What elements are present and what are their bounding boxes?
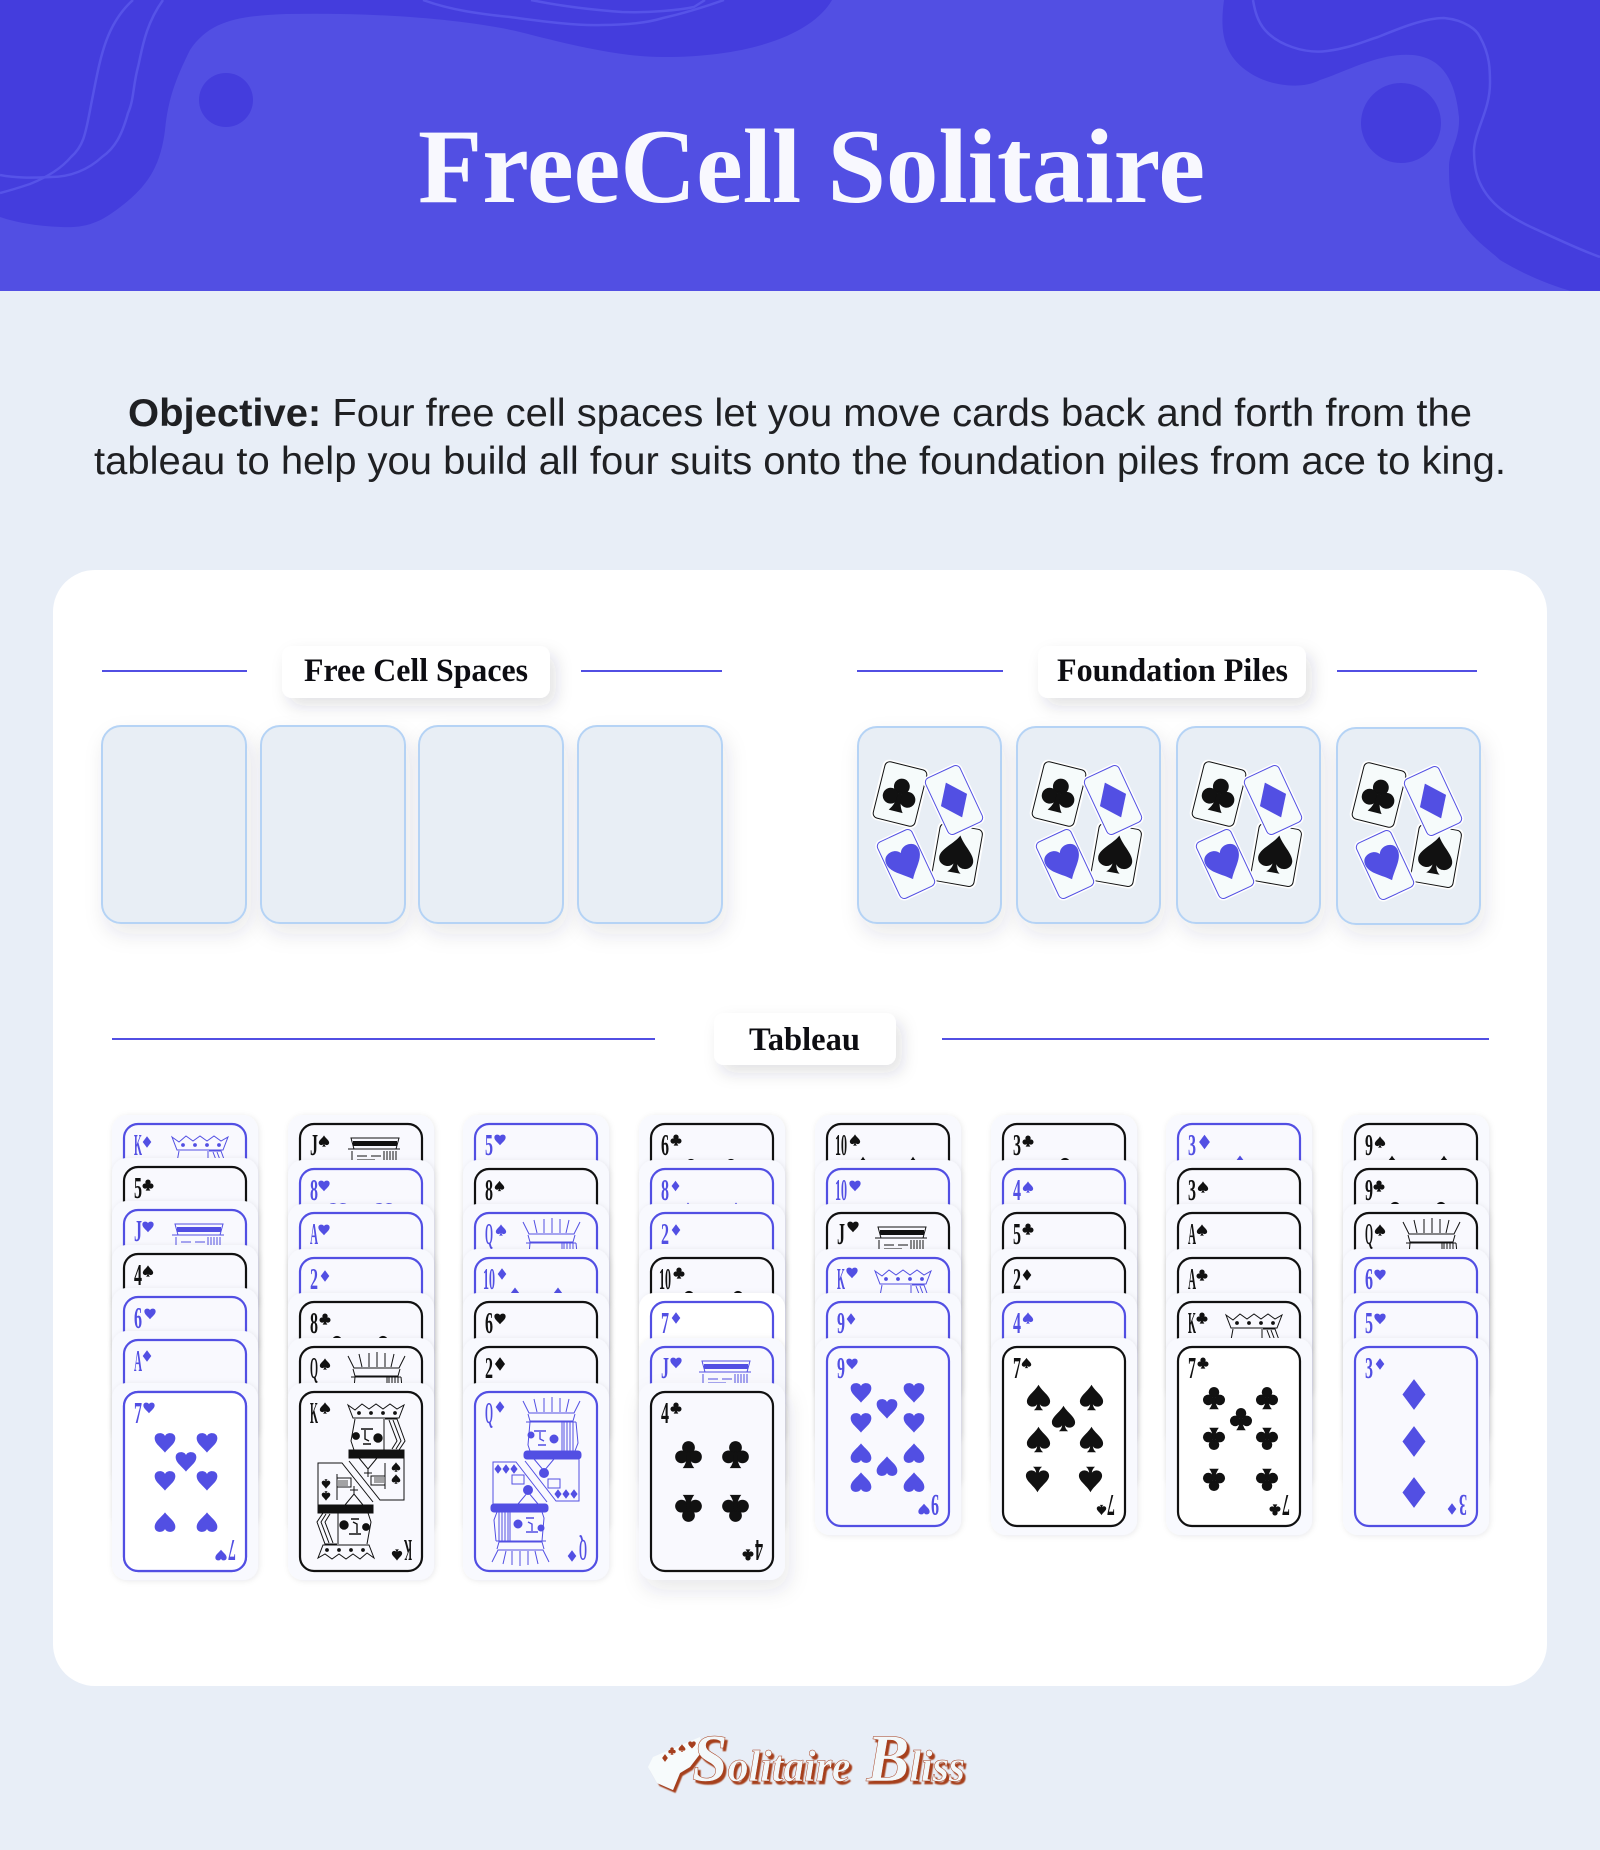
objective text: [94, 392, 1506, 483]
objective text: tableau to help you build all four suits onto the foundation piles from ace to king.: [94, 440, 1506, 483]
card 5 hearts: 5: [485, 1127, 493, 1162]
card 4 spades: 4: [134, 1257, 142, 1292]
card 2 diamonds: [288, 1249, 434, 1446]
column 3: [463, 1115, 609, 1580]
logo: Solitaire Bliss: Solitaire Bliss: [692, 1720, 965, 1796]
card 7 spades, top of column: 7: [1013, 1350, 1021, 1385]
card 3 diamonds: [1166, 1115, 1312, 1312]
card K hearts: [815, 1249, 961, 1446]
card 7 diamonds: [639, 1293, 785, 1490]
card 7 clubs, top of column: [1166, 1338, 1312, 1535]
heading: free cell spaces: Free Cell Spaces: [304, 653, 528, 689]
card A hearts: [288, 1204, 434, 1401]
card J hearts: [112, 1201, 258, 1398]
card J spades: J: [310, 1127, 318, 1162]
card 8 diamonds: [639, 1160, 785, 1357]
card A clubs: [1166, 1249, 1312, 1446]
card 3 diamonds, top of column: [1343, 1338, 1489, 1535]
card 3 spades: [1166, 1160, 1312, 1357]
card K spades, top of column: K: [404, 1533, 412, 1568]
card 7 spades, top of column: 7: [1107, 1488, 1115, 1523]
heading: foundation piles: [1038, 646, 1306, 698]
card 3 clubs: [991, 1115, 1137, 1312]
card 5 hearts: [1343, 1293, 1489, 1490]
column 7: [1166, 1115, 1312, 1535]
header banner: [0, 0, 1600, 291]
card 10 hearts: [815, 1160, 961, 1357]
card 10 clubs: [639, 1249, 785, 1446]
card 2 diamonds: 2: [310, 1261, 318, 1296]
card 10 diamonds: [463, 1249, 609, 1446]
card 2 diamonds black: 2: [1013, 1261, 1021, 1296]
column 1: [112, 1115, 258, 1580]
column 6: [991, 1115, 1137, 1535]
foundation pile 2: [1017, 727, 1160, 923]
card 3 diamonds, top of column: 3: [1365, 1350, 1373, 1385]
card 6 clubs: 6: [661, 1127, 669, 1162]
card K clubs: K: [1188, 1305, 1196, 1340]
card 5 clubs: [112, 1158, 258, 1355]
card 5 hearts: [463, 1115, 609, 1312]
card 5 clubs: 5: [1013, 1216, 1021, 1251]
card 7 diamonds: 7: [661, 1305, 669, 1340]
card 4 spades blue: 4: [1013, 1172, 1021, 1207]
card 6 hearts: 6: [134, 1300, 142, 1335]
card 8 diamonds: 8: [661, 1172, 669, 1207]
card 9 clubs: 9: [1365, 1172, 1373, 1207]
title: FreeCell Solitaire: [418, 108, 1205, 225]
card 6 hearts: 6: [1365, 1261, 1373, 1296]
column 2: [288, 1115, 434, 1580]
card 2 diamonds black: 2: [485, 1350, 493, 1385]
card 4 clubs, top of column: 4: [661, 1395, 669, 1430]
card 9 hearts, top of column: [815, 1338, 961, 1535]
card K diamonds: K: [134, 1127, 142, 1162]
card K diamonds: [112, 1115, 258, 1312]
card 6 clubs: [639, 1115, 785, 1312]
card 4 spades blue: [991, 1293, 1137, 1490]
card J hearts: J: [661, 1350, 669, 1385]
card Q spades blue: [463, 1204, 609, 1401]
card A diamonds: A: [134, 1343, 142, 1378]
card 6 hearts black: 6: [485, 1305, 493, 1340]
card 7 spades, top of column: [991, 1338, 1137, 1535]
card 4 spades blue: [991, 1160, 1137, 1357]
card J hearts: [639, 1338, 785, 1535]
card 9 diamonds: [815, 1293, 961, 1490]
card Q spades: Q: [310, 1350, 318, 1385]
card A spades: A: [1188, 1216, 1196, 1251]
card 6 hearts black: [463, 1293, 609, 1490]
card 3 spades: 3: [1188, 1172, 1196, 1207]
section: tableau: [112, 1013, 1489, 1580]
card 8 clubs: 8: [310, 1305, 318, 1340]
card 5 clubs: 5: [134, 1170, 142, 1205]
card 7 clubs, top of column: 7: [1188, 1350, 1196, 1385]
card K spades, top of column: K: [310, 1395, 318, 1430]
card 6 hearts: [112, 1288, 258, 1485]
card J hearts black: [815, 1204, 961, 1401]
card 6 hearts: [1343, 1249, 1489, 1446]
card 2 diamonds: 2: [661, 1216, 669, 1251]
card 7 clubs, top of column: 7: [1282, 1488, 1290, 1523]
card 3 clubs: 3: [1013, 1127, 1021, 1162]
heading: foundation piles: Foundation Piles: [1057, 653, 1288, 689]
card J hearts black: J: [837, 1216, 845, 1251]
card 5 clubs: [991, 1204, 1137, 1401]
card 9 diamonds: 9: [837, 1305, 845, 1340]
card 9 clubs: [1343, 1160, 1489, 1357]
card 9 spades: 9: [1365, 1127, 1373, 1162]
card 4 clubs, top of column: 4: [755, 1533, 763, 1568]
card 2 diamonds black: [463, 1338, 609, 1535]
free cell slots: [102, 726, 722, 923]
column 8: [1343, 1115, 1489, 1535]
card Q diamonds, top of column: [463, 1383, 609, 1580]
card K clubs: [1166, 1293, 1312, 1490]
foundation pile 1: [858, 727, 1001, 923]
column 5: [815, 1115, 961, 1535]
card 9 hearts, top of column: 9: [837, 1350, 845, 1385]
icon: fan of cards: [648, 1737, 703, 1790]
card 9 spades: [1343, 1115, 1489, 1312]
heading: tableau: [714, 1013, 896, 1065]
card 8 spades: 8: [485, 1172, 493, 1207]
card Q spades blue: Q: [485, 1216, 493, 1251]
heading: tableau: Tableau: [749, 1022, 860, 1058]
foundation pile 3: [1177, 727, 1320, 923]
card A clubs: A: [1188, 1261, 1196, 1296]
card 3 diamonds: 3: [1188, 1127, 1196, 1162]
heading: free cell spaces: [282, 646, 550, 698]
card Q diamonds, top of column: Q: [485, 1395, 493, 1430]
card 4 clubs, top of column: [639, 1383, 785, 1580]
card Q spades: [288, 1338, 434, 1535]
card Q spades: [1343, 1204, 1489, 1401]
card 10 clubs: 10: [659, 1261, 671, 1296]
foundation pile 4: [1337, 728, 1480, 924]
card 4 spades blue: 4: [1013, 1305, 1021, 1340]
column 4: [639, 1115, 785, 1580]
card 7 hearts, top of column: 7: [228, 1533, 236, 1568]
card J spades: [288, 1115, 434, 1312]
card 3 diamonds, top of column: 3: [1459, 1488, 1467, 1523]
card 10 diamonds: 10: [483, 1261, 495, 1296]
section: foundation piles: [857, 646, 1480, 924]
card 10 spades: [815, 1115, 961, 1312]
card K spades, top of column: [288, 1383, 434, 1580]
objective text: Objective: Four free cell spaces let you move cards back and forth from the: [128, 392, 1472, 435]
card A hearts: A: [310, 1216, 318, 1251]
card 8 clubs: [288, 1293, 434, 1490]
card 10 spades: 10: [835, 1127, 847, 1162]
card 2 diamonds: [639, 1204, 785, 1401]
card 7 hearts, top of column: 7: [134, 1395, 142, 1430]
card 5 hearts: 5: [1365, 1305, 1373, 1340]
card 9 hearts, top of column: 9: [931, 1488, 939, 1523]
card A spades: [1166, 1204, 1312, 1401]
card 10 hearts: 10: [835, 1172, 847, 1207]
card 8 hearts: [288, 1160, 434, 1357]
card A diamonds: [112, 1331, 258, 1528]
card K hearts: K: [837, 1261, 845, 1296]
card 2 diamonds black: [991, 1249, 1137, 1446]
card Q diamonds, top of column: Q: [579, 1533, 587, 1568]
card J hearts: J: [134, 1213, 142, 1248]
card 4 spades: [112, 1245, 258, 1442]
card 8 hearts: 8: [310, 1172, 318, 1207]
card 7 hearts, top of column: [112, 1383, 258, 1580]
card Q spades: Q: [1365, 1216, 1373, 1251]
section: free cell spaces: [102, 646, 722, 923]
main white panel: [53, 570, 1547, 1686]
card 8 spades: [463, 1160, 609, 1357]
